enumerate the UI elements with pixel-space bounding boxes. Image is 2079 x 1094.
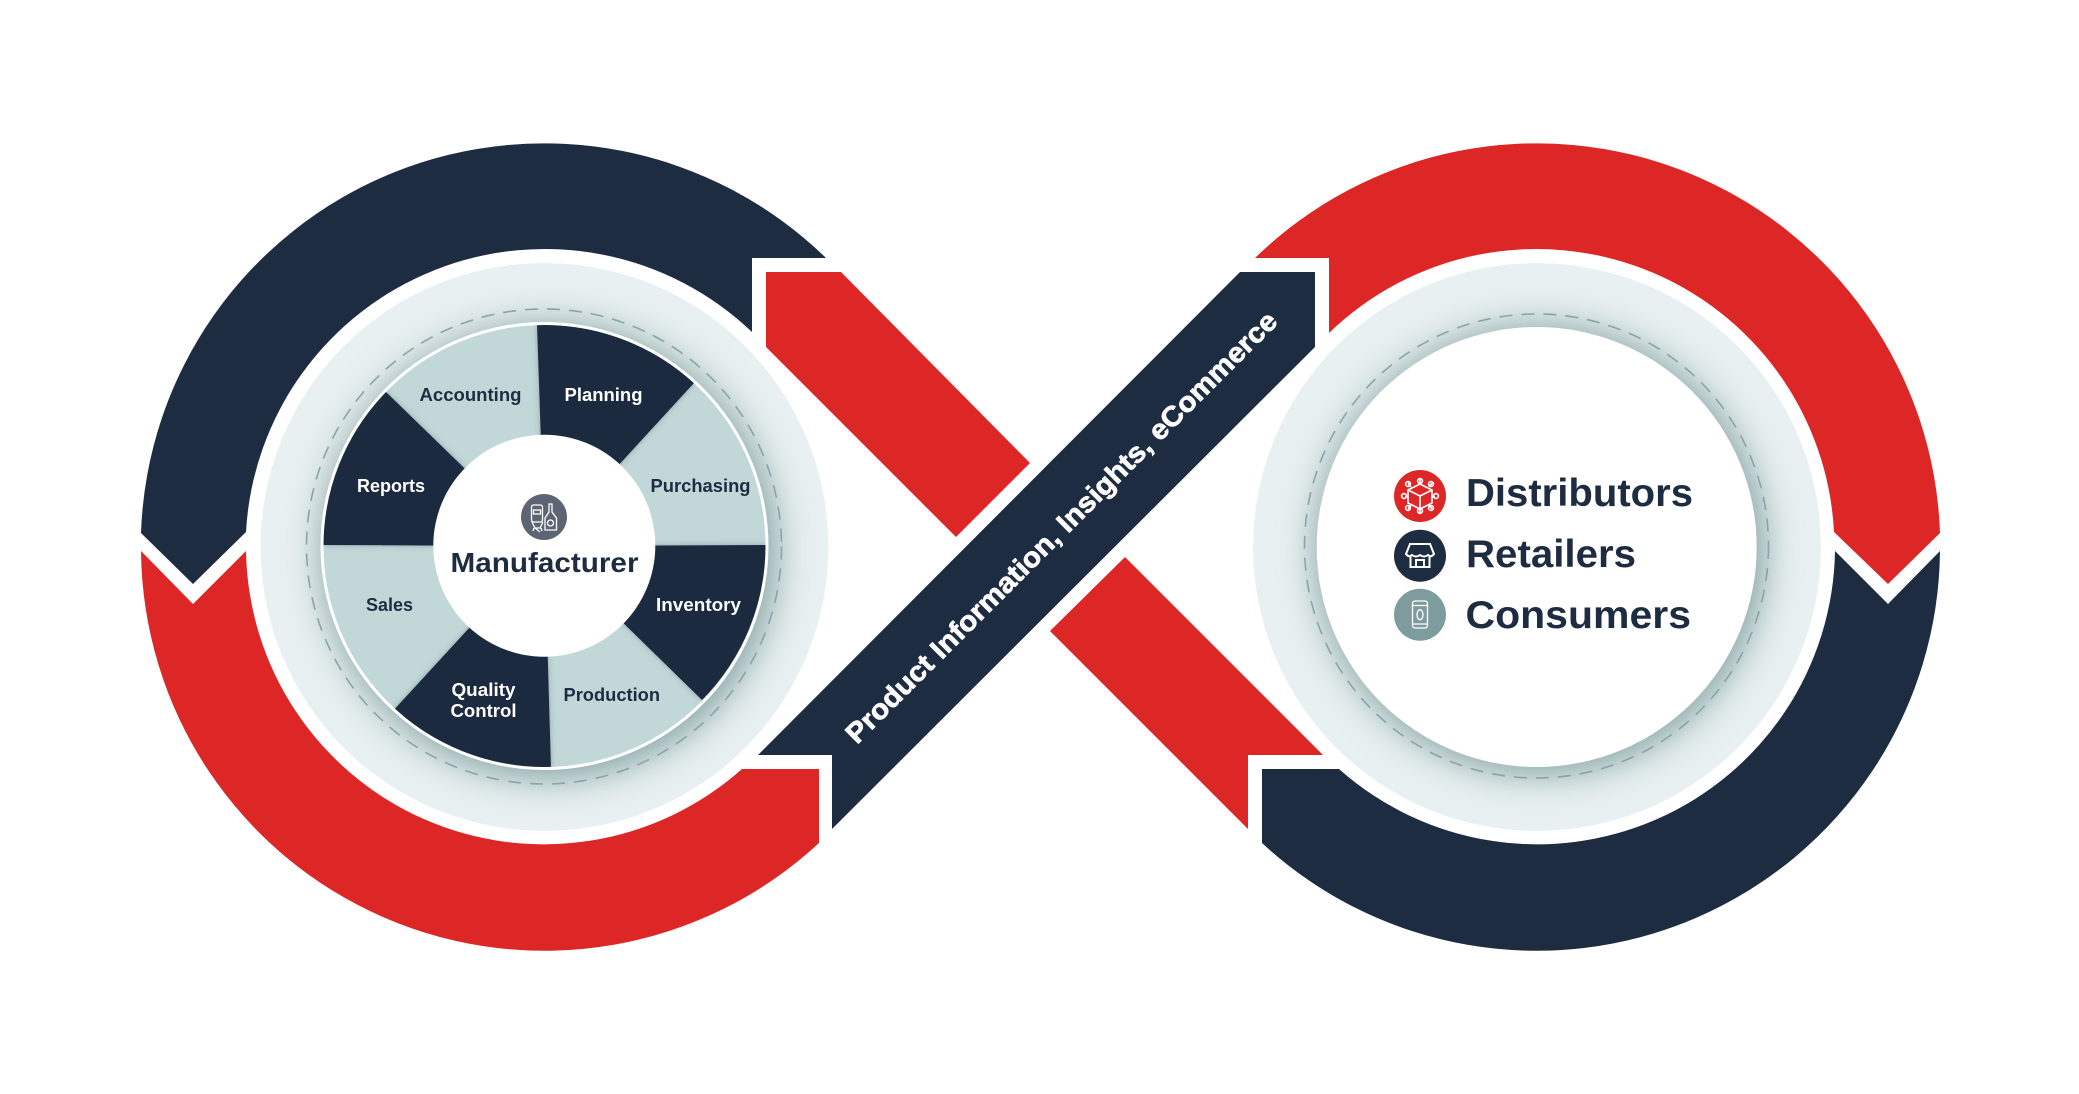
label: quality control: [450, 679, 516, 721]
sector: inventory: [622, 542, 766, 701]
right loop: red arrow: [1255, 143, 1940, 584]
sector: reports: [324, 390, 466, 548]
icon: factory tanks: [521, 494, 567, 540]
panel: manufacturer wheel: [260, 263, 828, 831]
title: manufacturer: Manufacturer: [450, 547, 639, 578]
label: production: Production: [564, 684, 660, 705]
dashed orbit: [1304, 314, 1768, 778]
pale halo disc: [260, 263, 828, 831]
label: accounting: Accounting: [420, 384, 522, 405]
label: purchasing: Purchasing: [650, 475, 750, 496]
dashed orbit: [306, 309, 782, 784]
label: retailers: Retailers: [1466, 533, 1636, 576]
label: distributors: Distributors: [1466, 472, 1693, 515]
label: quality control: Quality: [452, 679, 516, 700]
white centre: [1317, 327, 1757, 767]
left loop: red arrow: [141, 551, 819, 951]
label: planning: Planning: [564, 384, 642, 405]
right loop: navy arrow: [1262, 551, 1940, 951]
navy band with label: [758, 272, 1315, 829]
icon: retailers storefront: [1394, 530, 1446, 582]
icon: distributors network box: [1394, 470, 1446, 522]
band label: Product Information, Insights, eCommerce: [839, 305, 1283, 749]
hub: [433, 435, 655, 657]
wheel base: [322, 324, 766, 768]
sector: planning: [534, 325, 695, 466]
crossing: upper red band: [766, 272, 1030, 537]
pale halo disc: [1253, 263, 1821, 831]
label: quality control: Control: [450, 700, 516, 721]
label: inventory: Inventory: [656, 594, 742, 615]
crossing: lower red band: [1050, 557, 1323, 829]
left loop: navy arrow: [141, 143, 826, 584]
panel: downstream partners: [1253, 263, 1821, 831]
wheel outer rim: [322, 324, 767, 768]
navy sectors: [323, 325, 766, 768]
label: sales: Sales: [366, 594, 413, 615]
icon: consumers can: [1394, 589, 1446, 641]
label: consumers: Consumers: [1466, 594, 1691, 637]
label: reports: Reports: [357, 475, 425, 496]
sector: quality control: [394, 546, 551, 768]
